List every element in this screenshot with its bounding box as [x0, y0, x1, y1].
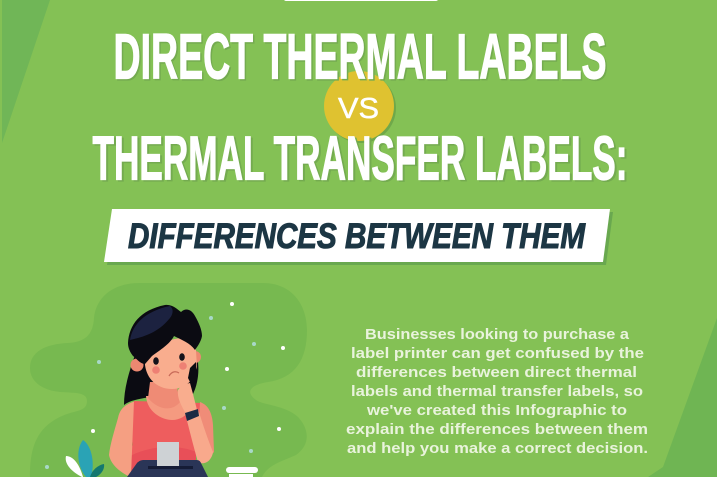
intro paragraph: label printer can get confused by the — [351, 345, 644, 362]
icon: plant — [66, 440, 104, 477]
background blob behind illustration — [30, 283, 307, 477]
icon: white stand — [226, 467, 258, 477]
intro paragraph: Businesses looking to purchase a — [365, 326, 630, 343]
neck — [148, 382, 180, 408]
tank top — [131, 401, 202, 477]
right forearm — [185, 409, 213, 463]
hair strand over cheek — [188, 362, 197, 386]
eyes — [153, 357, 159, 365]
hair top — [128, 305, 202, 364]
hand — [178, 383, 197, 414]
lower shirt shade — [131, 447, 196, 477]
back hair — [124, 352, 170, 405]
wristband — [185, 409, 199, 421]
ballot box — [127, 442, 208, 477]
paper — [157, 442, 179, 466]
top white tab — [284, 0, 438, 1]
chest — [146, 396, 190, 420]
subtitle banner — [104, 209, 613, 265]
right hair strand — [184, 350, 198, 396]
intro paragraph: we've created this Infographic to — [366, 402, 627, 419]
subtitle banner: DIFFERENCES BETWEEN THEM — [128, 217, 586, 256]
face — [145, 335, 197, 389]
decorative dots — [45, 302, 285, 469]
ears — [130, 358, 144, 372]
intro paragraph: differences between direct thermal — [356, 364, 637, 381]
illustration: thinking woman — [109, 305, 214, 477]
bottom-right corner shape — [648, 318, 717, 477]
slot — [148, 466, 193, 469]
intro paragraph: explain the differences between them — [346, 421, 648, 438]
mouth — [169, 372, 179, 376]
hair highlight — [130, 306, 173, 340]
vs badge: VS — [338, 93, 379, 125]
intro paragraph: and help you make a correct decision. — [347, 440, 648, 457]
vs badge — [324, 71, 396, 143]
intro paragraph: labels and thermal transfer labels, so — [351, 383, 643, 400]
cheeks — [152, 366, 160, 374]
right upper arm — [198, 402, 214, 462]
left arm — [109, 401, 146, 477]
intro paragraph — [346, 326, 648, 457]
top-left corner shape — [2, 0, 50, 143]
